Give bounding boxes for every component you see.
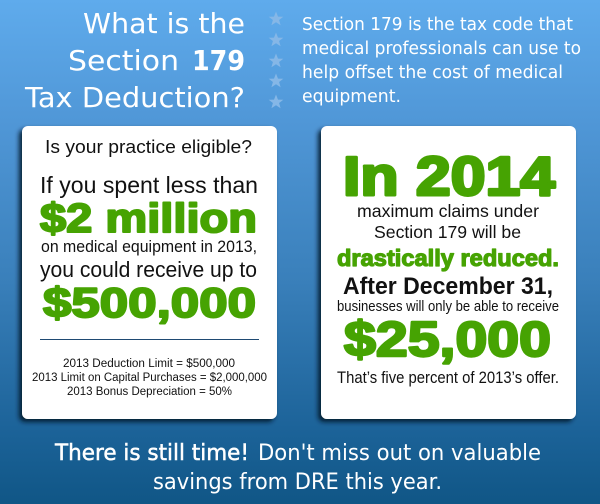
call to action	[54, 440, 541, 495]
drastically reduced: drastically reduced.	[337, 245, 559, 271]
intro text block: Section 179 is the tax code that	[302, 15, 573, 35]
title: What is the	[83, 8, 245, 40]
big year heading: In 2014	[343, 145, 555, 207]
title: Section	[68, 45, 179, 77]
deduction limits	[32, 358, 267, 398]
closing note: That’s five percent of 2013’s offer.	[337, 368, 559, 387]
deduction limits: 2013 Deduction Limit = $500,000	[63, 358, 235, 370]
title: Tax Deduction?	[24, 82, 245, 114]
icon: column of stars	[269, 12, 283, 108]
eligibility statement: $500,000	[43, 279, 256, 326]
card background	[321, 126, 576, 419]
eligibility statement	[40, 172, 258, 326]
call to action: There is still time!	[54, 440, 249, 466]
amount: $25,000	[344, 313, 551, 367]
intro text block: help offset the cost of medical	[302, 63, 563, 83]
intro text block: equipment.	[302, 87, 401, 107]
question heading: Is your practice eligible?	[45, 136, 252, 157]
title	[24, 8, 245, 114]
eligibility statement: If you spent less than	[40, 172, 258, 198]
claims statement: maximum claims under	[357, 201, 539, 221]
claims statement: Section 179 will be	[374, 222, 521, 242]
deduction limits: 2013 Limit on Capital Purchases = $2,000,000	[32, 372, 267, 384]
card background	[22, 126, 277, 419]
eligibility statement: $2 million	[40, 195, 257, 241]
eligibility statement: on medical equipment in 2013,	[41, 238, 257, 256]
deduction limits: 2013 Bonus Depreciation = 50%	[67, 386, 232, 398]
panel: 2014 reduction card	[321, 126, 576, 419]
panel: eligibility card	[22, 126, 277, 419]
call to action: savings from DRE this year.	[153, 469, 442, 495]
divider line	[40, 339, 259, 340]
businesses note: businesses will only be able to receive	[337, 299, 559, 315]
deadline: After December 31,	[343, 273, 553, 300]
title: 179	[192, 45, 245, 77]
intro text block: medical professionals can use to	[302, 39, 581, 59]
intro text block	[302, 15, 581, 107]
eligibility statement: you could receive up to	[40, 257, 257, 282]
call to action: Don't miss out on valuable	[258, 440, 541, 466]
claims statement	[357, 201, 539, 242]
